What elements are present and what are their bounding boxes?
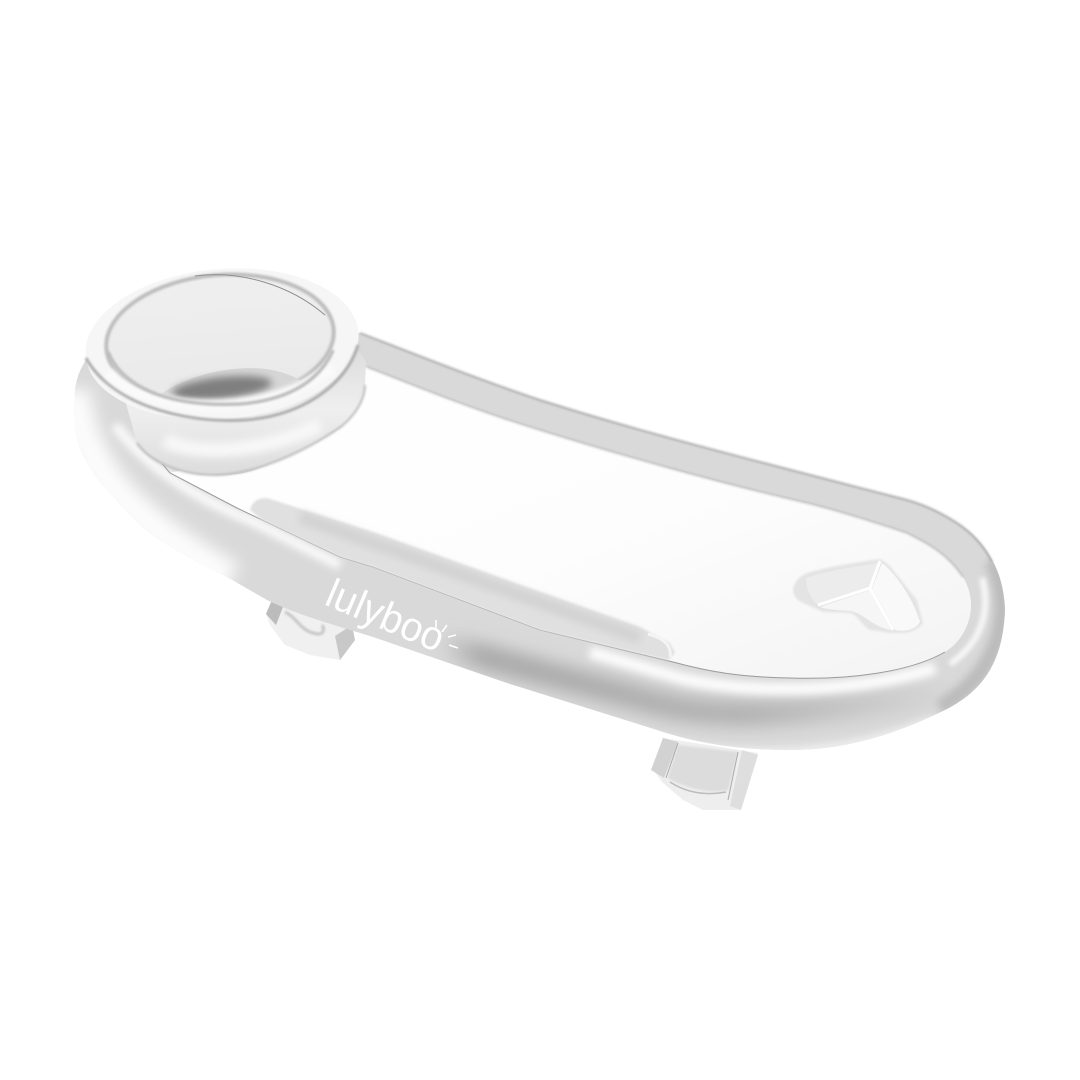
ring lower band	[86, 345, 358, 420]
cup opening	[101, 265, 339, 413]
left rim light base	[72, 390, 230, 580]
cup holder	[79, 257, 366, 475]
bottom rim light	[719, 716, 931, 750]
logo: lulyboo: lulyboo	[319, 570, 452, 661]
foot: left clip	[266, 600, 355, 660]
right inner highlight	[950, 578, 985, 664]
product illustration: lulyboo snack tray	[74, 268, 1005, 810]
cup ring	[79, 257, 365, 431]
cup wall lower edge	[137, 385, 365, 475]
front rim dark band	[440, 645, 960, 714]
cup inner base sliver	[157, 368, 305, 403]
back rim outer edge line	[360, 333, 992, 562]
tray floor	[135, 367, 971, 678]
ring front highlight	[108, 368, 332, 405]
cup inner dark shadow	[171, 372, 273, 404]
right end shading	[940, 560, 1002, 708]
cup wall highlight	[165, 425, 320, 450]
foot: right clip	[651, 738, 758, 810]
ring top dark hairline	[195, 275, 325, 315]
heart shaped nub	[793, 559, 923, 633]
tray body	[72, 333, 1005, 753]
inner rim highlight	[115, 425, 340, 565]
long slot recess	[250, 498, 675, 660]
upper front rim highlight	[590, 652, 935, 689]
cup outer wall	[125, 345, 366, 475]
ring inner lower edge	[108, 350, 333, 404]
